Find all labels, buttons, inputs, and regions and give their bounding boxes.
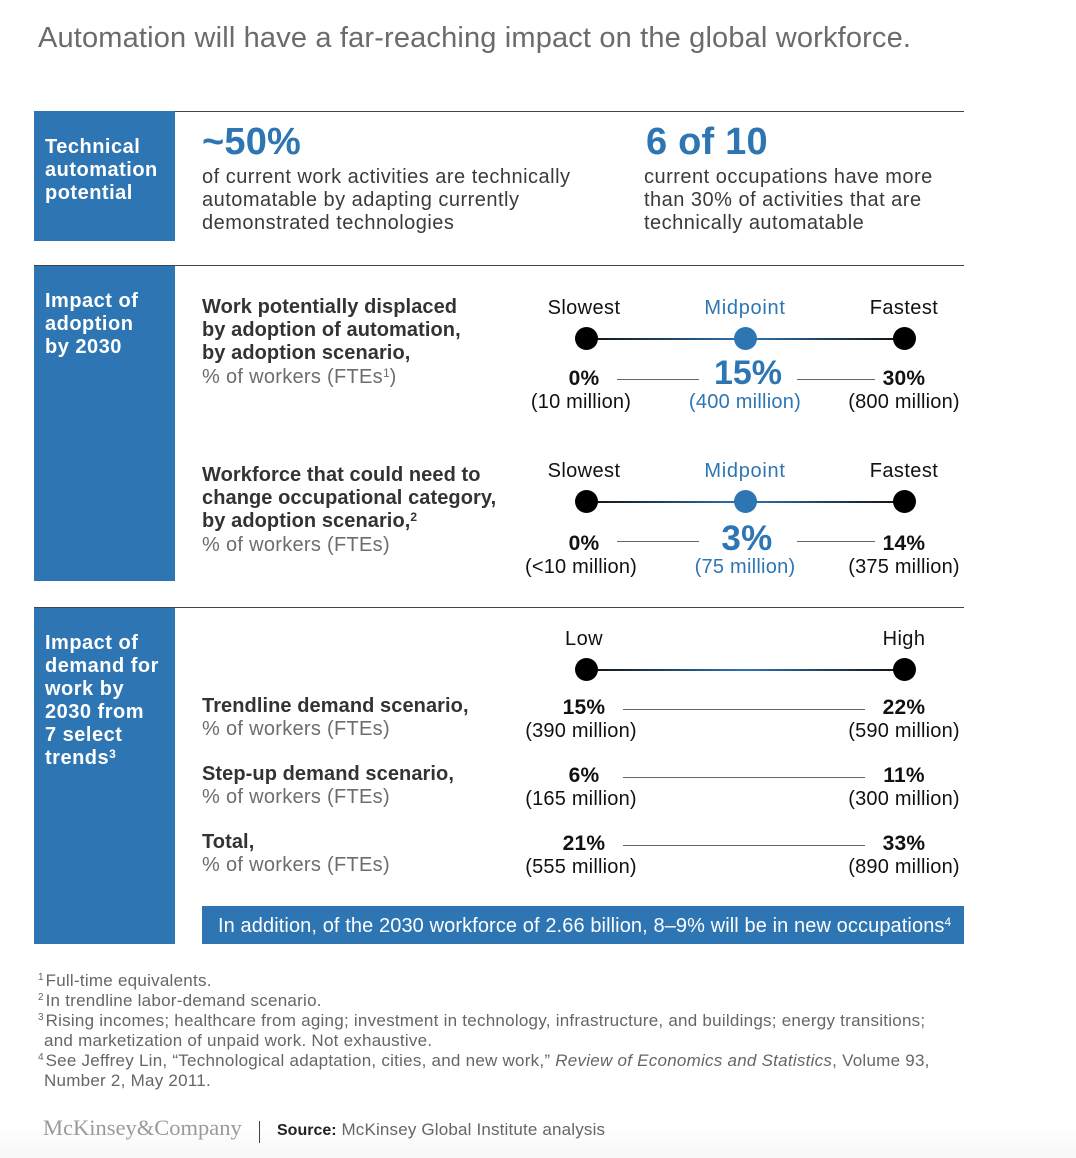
dot: slowest [575,327,598,350]
panel label: adoption [45,290,138,358]
dot: fastest [893,490,916,513]
low value: 21% [563,832,605,855]
section rule: technical [34,111,964,112]
text: work potentially displaced: by adoption of automation, [202,319,461,341]
scale label: slowest: Slowest [548,460,620,482]
text: workforce change occupational category: change occupational category, [202,487,496,509]
connector [623,777,865,778]
value: 0 percent: 0% [569,367,599,390]
section rule: adoption [34,265,964,266]
scale: work displaced [531,297,960,413]
panel label: demand: work by [45,678,124,700]
low value [525,832,637,878]
callout: new occupations [202,906,964,944]
low value: 6% [569,764,599,787]
value: 0 percent: (10 million) [531,391,631,413]
panel label: technical: potential [45,182,133,204]
high value [848,764,960,810]
row label: % of workers (FTEs) [202,786,390,808]
scale label: fastest: Fastest [870,460,938,482]
footnotes [38,971,930,1090]
connector [623,845,865,846]
connector left [617,541,699,542]
panel label block: technical [34,111,175,241]
footnotes: and marketization of unpaid work. Not exhaustive. [44,1031,432,1050]
value: 0 percent: 0% [569,532,599,555]
low value: 15% [563,696,605,719]
value: 14 percent: 14% [883,532,925,555]
low value [525,764,637,810]
high value [848,832,960,878]
value: 14 percent [848,532,960,578]
bottom shading [0,1125,1076,1158]
dot: slowest [575,490,598,513]
value: 30 percent: (800 million) [848,391,960,413]
scale line [586,501,904,503]
source: Source: McKinsey Global Institute analysis [277,1120,605,1139]
scale label: high: High [883,628,925,650]
text: work potentially displaced [202,296,461,388]
text: workforce change occupational category: % of workers (FTEs) [202,534,390,556]
title: Automation will have a far-reaching impact on the global workforce. [38,22,911,54]
panel label: demand: 7 select [45,724,122,746]
high value: 33% [883,832,925,855]
low value [525,696,637,742]
row label: Trendline demand scenario, [202,695,469,717]
panel label block: demand [34,608,175,944]
value: 75 million: (75 million) [695,556,795,578]
stat text: 6 of 10: current occupations have more [644,166,933,188]
scale line [586,338,904,340]
value: 15 percent: 15% [714,354,782,392]
panel label: demand: demand for [45,655,159,677]
row label: % of workers (FTEs) [202,854,390,876]
connector left [617,379,699,380]
high value: (890 million) [848,856,960,878]
footnotes: Number 2, May 2011. [44,1071,211,1090]
section rule: demand [34,607,964,608]
callout: new occupations: In addition, of the 2030 workforce of 2.66 billion, 8–9% will be in new occupations4 [218,915,951,937]
panel label: demand [44,632,159,769]
row label [202,763,454,808]
text: work potentially displaced: % of workers (FTEs1) [202,366,397,388]
value: 0 percent [525,532,637,578]
stat text: about 50 percent: automatable by adapting currently [202,189,519,211]
scale label: slowest: Slowest [548,297,620,319]
stat: about 50 percent: ~50% [202,121,301,163]
low value: (165 million) [525,788,637,810]
dot: midpoint [734,490,757,513]
panel label: adoption: by 2030 [45,336,122,358]
panel label block: adoption [34,266,175,581]
text: work potentially displaced: by adoption scenario, [202,342,410,364]
dot: low [575,658,598,681]
low value: (390 million) [525,720,637,742]
dot: high [893,658,916,681]
scale: occupational change [525,460,960,578]
panel label: technical [45,136,158,204]
footnotes: 1Full-time equivalents. [38,971,212,990]
scale: low to high [565,628,925,681]
dot: fastest [893,327,916,350]
connector right [797,541,875,542]
value: 30 percent: 30% [883,367,925,390]
connector right [797,379,875,380]
panel label: demand: 2030 from [45,701,144,723]
value: 400 million: (400 million) [689,391,801,413]
value: 0 percent [531,367,631,413]
footnotes: 4See Jeffrey Lin, “Technological adaptation, cities, and new work,” Review of Economics and Statistics, Volume 93, [38,1051,930,1070]
dot: midpoint [734,327,757,350]
logo: McKinsey & Company: McKinsey&Company [43,1115,242,1140]
value: 3 percent: 3% [721,519,773,558]
row label [202,831,390,876]
logo separator [259,1121,260,1143]
value: 30 percent [848,367,960,413]
stat text: about 50 percent: demonstrated technologies [202,212,454,234]
scale label: low: Low [565,628,603,650]
stat text: about 50 percent [202,166,570,234]
row: trendline demand [202,695,960,742]
stat text: about 50 percent: of current work activities are technically [202,166,570,188]
connector [623,709,865,710]
scale label: midpoint: Midpoint [704,297,786,319]
row label [202,695,469,740]
high value [848,696,960,742]
value: 14 percent: (375 million) [848,556,960,578]
stat text: 6 of 10: than 30% of activities that are [644,189,922,211]
row label: % of workers (FTEs) [202,718,390,740]
footnotes: 3Rising incomes; healthcare from aging; investment in technology, infrastructure, and buildings; energy transitions; [38,1011,925,1030]
high value: 22% [883,696,925,719]
panel label: adoption: Impact of [45,290,138,312]
panel label: adoption: adoption [45,313,133,335]
value: 0 percent: (<10 million) [525,556,637,578]
text: workforce change occupational category: by adoption scenario,2 [202,510,417,532]
panel label: demand: Impact of [45,632,138,654]
stat text: 6 of 10 [644,166,933,234]
scale label: fastest: Fastest [870,297,938,319]
high value: 11% [883,764,925,787]
panel label: technical: Technical [45,136,140,158]
stat text: 6 of 10: technically automatable [644,212,864,234]
low value: (555 million) [525,856,637,878]
text: workforce change occupational category [202,464,496,556]
scale line [586,669,904,671]
high value: (590 million) [848,720,960,742]
row: step-up demand [202,763,960,810]
text: work potentially displaced: Work potentially displaced [202,296,457,318]
footnotes: 2In trendline labor-demand scenario. [38,991,322,1010]
high value: (300 million) [848,788,960,810]
panel label: technical: automation [45,159,158,181]
stat: 6 of 10: 6 of 10 [646,121,768,163]
row: total [202,831,960,878]
text: workforce change occupational category: Workforce that could need to [202,464,481,486]
row label: Total, [202,831,254,853]
panel label: demand: trends3 [45,747,116,769]
row label: Step-up demand scenario, [202,763,454,785]
scale label: midpoint: Midpoint [704,460,786,482]
